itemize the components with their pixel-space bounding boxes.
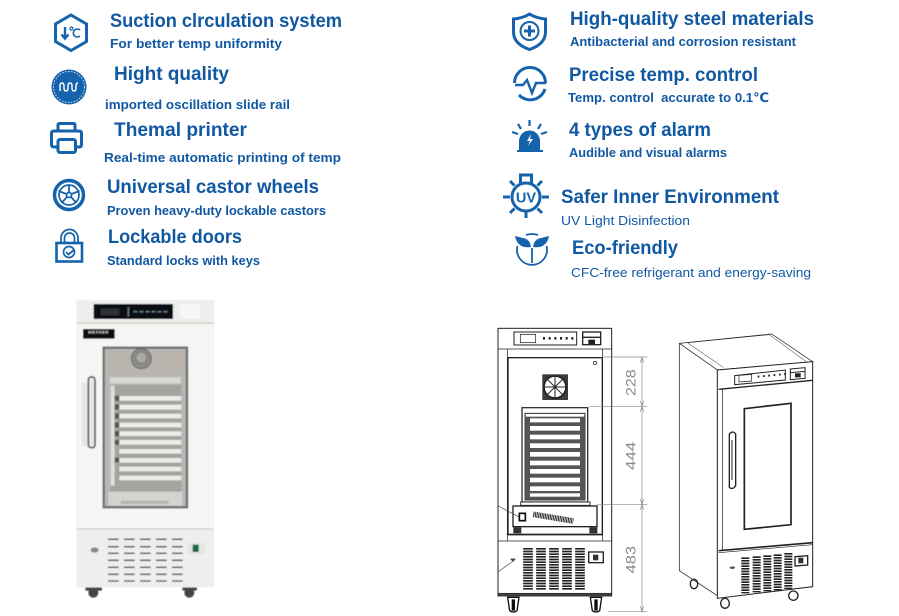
heading: Suction clrculation system xyxy=(110,10,342,32)
feature: eco-friendly xyxy=(515,234,811,280)
dimension labels xyxy=(624,369,639,573)
brand plate: METHER xyxy=(88,330,109,335)
perspective technical drawing xyxy=(679,334,813,608)
icon: pulse xyxy=(514,67,546,100)
feature: suction circulation system xyxy=(56,10,342,51)
printer slot xyxy=(179,304,201,319)
glass window xyxy=(104,348,187,507)
icon: alarm beacon xyxy=(512,120,547,152)
castors xyxy=(508,597,602,612)
shelf rack xyxy=(521,408,590,505)
feature: high quality rail xyxy=(52,63,290,112)
front xyxy=(717,362,813,598)
brand plate xyxy=(83,329,115,339)
subtext: Temp. control accurate to 0.1℃ xyxy=(568,90,769,105)
dimension lines xyxy=(589,357,647,612)
handle xyxy=(82,377,95,448)
heading: Eco-friendly xyxy=(572,237,678,259)
icon: shield xyxy=(514,14,546,50)
subtext: Audible and visual alarms xyxy=(569,145,727,160)
fan xyxy=(542,374,568,400)
front technical drawing with dimensions xyxy=(498,328,647,612)
heading: Safer Inner Environment xyxy=(561,186,779,208)
cabinet xyxy=(77,300,214,587)
icon: leaf xyxy=(515,234,549,265)
display panel xyxy=(94,304,173,319)
feature: UV disinfection xyxy=(503,175,779,228)
subtext: UV Light Disinfection xyxy=(561,213,690,228)
heading: 4 types of alarm xyxy=(569,119,711,141)
key lock and switch xyxy=(498,552,603,572)
icon: hexagon temperature xyxy=(56,15,86,50)
drawer unit xyxy=(498,506,597,533)
vents xyxy=(528,548,580,590)
castors xyxy=(690,579,798,608)
inner chamber xyxy=(508,358,602,534)
heading: Themal printer xyxy=(114,119,247,141)
subtext: For better temp uniformity xyxy=(110,36,283,51)
feature: thermal printer xyxy=(52,119,341,165)
subtext: imported oscillation slide rail xyxy=(105,97,290,112)
icon: oscillation xyxy=(52,70,86,104)
dimension labels: 228 xyxy=(624,369,639,396)
switch xyxy=(795,556,808,566)
lock xyxy=(91,547,99,553)
castors xyxy=(85,587,197,598)
feature: steel materials xyxy=(514,8,814,50)
icon: wheel xyxy=(54,180,84,210)
glass door xyxy=(744,403,791,529)
control panel xyxy=(735,368,805,385)
dimension labels: 444 xyxy=(624,441,639,470)
feature: castor wheels xyxy=(54,176,326,218)
feature: precise temperature control xyxy=(514,64,769,105)
product photo: refrigerator xyxy=(77,300,214,598)
icon: lock xyxy=(56,230,82,262)
icon: UV lamp xyxy=(503,175,549,218)
icon: UV lamp: UV xyxy=(516,190,536,206)
control panel xyxy=(514,332,601,345)
key lock xyxy=(730,566,735,569)
dimension labels: 483 xyxy=(624,546,639,573)
handle xyxy=(729,432,736,489)
subtext: Proven heavy-duty lockable castors xyxy=(107,203,326,218)
heading: Hight quality xyxy=(114,63,229,85)
vents xyxy=(745,553,788,593)
power switch xyxy=(187,543,205,554)
side and top xyxy=(679,334,813,596)
feature: alarm xyxy=(512,119,727,160)
heading: High-quality steel materials xyxy=(570,8,814,30)
subtext: Real-time automatic printing of temp xyxy=(104,150,341,165)
heading: Universal castor wheels xyxy=(107,176,319,198)
subtext: Standard locks with keys xyxy=(107,253,260,268)
feature: lockable doors xyxy=(56,226,260,268)
subtext: Antibacterial and corrosion resistant xyxy=(570,34,797,49)
subtext: CFC-free refrigerant and energy-saving xyxy=(571,265,811,280)
compressor vents xyxy=(108,539,183,581)
icon: printer xyxy=(52,124,82,152)
heading: Precise temp. control xyxy=(569,64,758,86)
heading: Lockable doors xyxy=(108,226,242,248)
cabinet outline xyxy=(498,328,612,596)
